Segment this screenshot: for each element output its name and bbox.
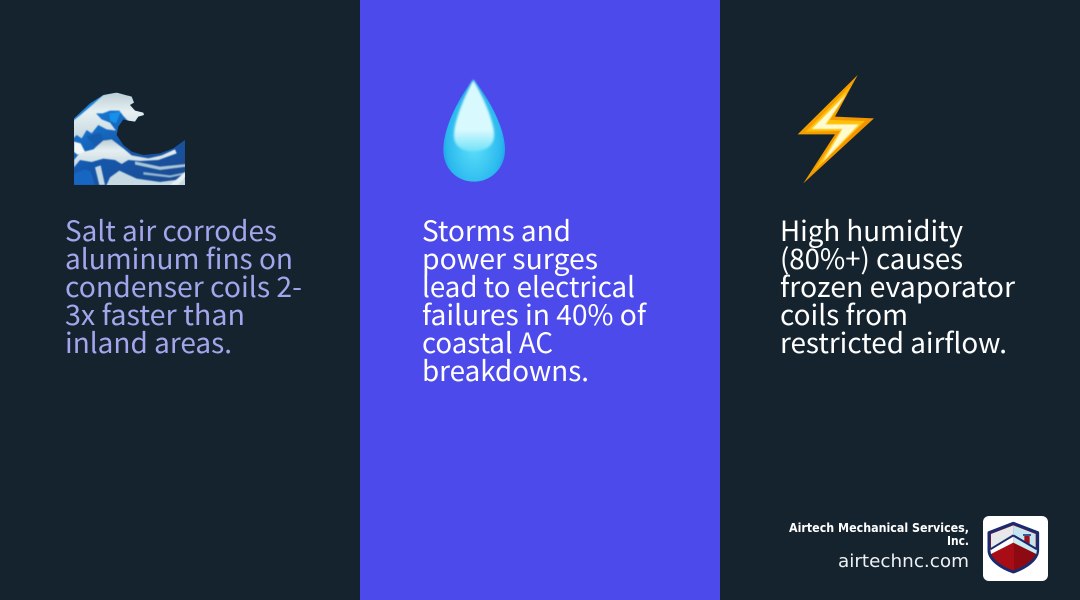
text: salt air: 3x faster than <box>65 294 245 334</box>
icon: ocean wave <box>74 92 185 185</box>
website: airtechnc.com <box>838 551 969 572</box>
text: storms: Storms and <box>422 210 571 250</box>
icon: water drop <box>443 79 505 182</box>
text: humidity: (80%+) causes <box>780 238 963 278</box>
icon: lightning bolt <box>798 75 874 183</box>
footer brand <box>789 516 1048 581</box>
text: humidity: High humidity <box>780 210 963 250</box>
company name: Airtech Mechanical Services, <box>789 520 969 535</box>
text: storms: breakdowns. <box>422 350 589 390</box>
text: salt air: condenser coils 2- <box>65 266 302 306</box>
logo <box>983 516 1048 581</box>
text: storms: power surges <box>422 238 598 278</box>
text: storms: coastal AC <box>422 322 553 362</box>
text: storms <box>422 210 647 390</box>
panel: salt air <box>66 92 301 354</box>
text: humidity: restricted airflow. <box>780 322 1007 362</box>
text: salt air: aluminum fins on <box>65 238 293 278</box>
text: salt air: Salt air corrodes <box>65 210 277 250</box>
text: storms: lead to electrical <box>422 266 635 306</box>
text: salt air <box>65 210 302 362</box>
text: salt air: inland areas. <box>65 322 232 362</box>
text: humidity <box>780 210 1015 362</box>
panel: humidity <box>720 0 1080 600</box>
text: storms: failures in 40% of <box>422 294 647 334</box>
company name <box>789 520 969 548</box>
company name: Inc. <box>947 533 969 548</box>
text: humidity: frozen evaporator <box>780 266 1015 306</box>
panel: storms <box>360 0 720 600</box>
text: humidity: coils from <box>780 294 908 334</box>
